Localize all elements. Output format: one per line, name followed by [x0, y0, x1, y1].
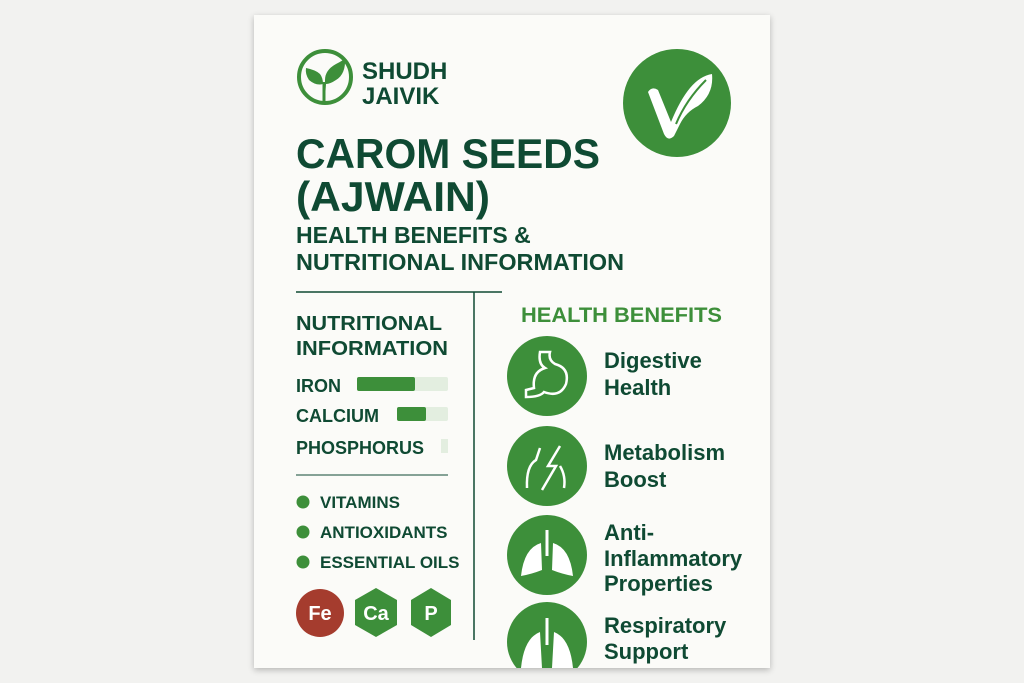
icon: vegan badge: [623, 49, 731, 157]
bar chart: minerals: [296, 376, 448, 458]
benefit: anti-inflammatory: Anti-: [604, 520, 654, 545]
heading: nutritional information: INFORMATION: [296, 338, 448, 360]
benefit: anti-inflammatory: Properties: [604, 571, 713, 596]
benefit: respiratory support: [507, 602, 727, 682]
bar chart: minerals: PHOSPHORUS: [296, 438, 424, 458]
subtitle: [296, 222, 624, 275]
title: (AJWAIN): [296, 173, 490, 220]
mineral badges: [296, 588, 451, 637]
bar chart: minerals: CALCIUM: [296, 406, 379, 426]
bullet list: ESSENTIAL OILS: [320, 553, 460, 572]
mineral badges: Fe: [308, 603, 332, 625]
title: CAROM SEEDS: [296, 130, 600, 177]
benefit: digestive health: Digestive: [604, 348, 702, 373]
subtitle: NUTRITIONAL INFORMATION: [296, 249, 624, 275]
benefit: metabolism boost: [507, 426, 725, 506]
logo: Shudh Jaivik: JAIVIK: [362, 83, 440, 110]
heading: nutritional information: [296, 313, 448, 360]
bar chart: minerals: IRON: [296, 376, 341, 396]
mineral badges: P: [424, 603, 438, 625]
bullet list: ANTIOXIDANTS: [320, 523, 448, 542]
title: [296, 130, 600, 220]
benefit: digestive health: [507, 336, 702, 416]
benefit: anti-inflammatory: [507, 515, 743, 596]
subtitle: HEALTH BENEFITS &: [296, 222, 531, 248]
benefit: respiratory support: Respiratory: [604, 613, 727, 638]
benefit: metabolism boost: Boost: [604, 467, 667, 492]
logo: Shudh Jaivik: SHUDH: [362, 58, 447, 85]
bullet list: VITAMINS: [320, 493, 400, 512]
benefit: digestive health: Health: [604, 375, 671, 400]
mineral badges: Ca: [363, 603, 390, 625]
poster card: [254, 15, 770, 668]
heading: health benefits: HEALTH BENEFITS: [521, 304, 722, 327]
benefit: respiratory support: Support: [604, 639, 689, 664]
logo: Shudh Jaivik: [299, 51, 447, 110]
heading: nutritional information: NUTRITIONAL: [296, 313, 442, 335]
bullet list: [296, 493, 460, 572]
benefit: metabolism boost: Metabolism: [604, 440, 725, 465]
benefit: anti-inflammatory: Inflammatory: [604, 546, 743, 571]
